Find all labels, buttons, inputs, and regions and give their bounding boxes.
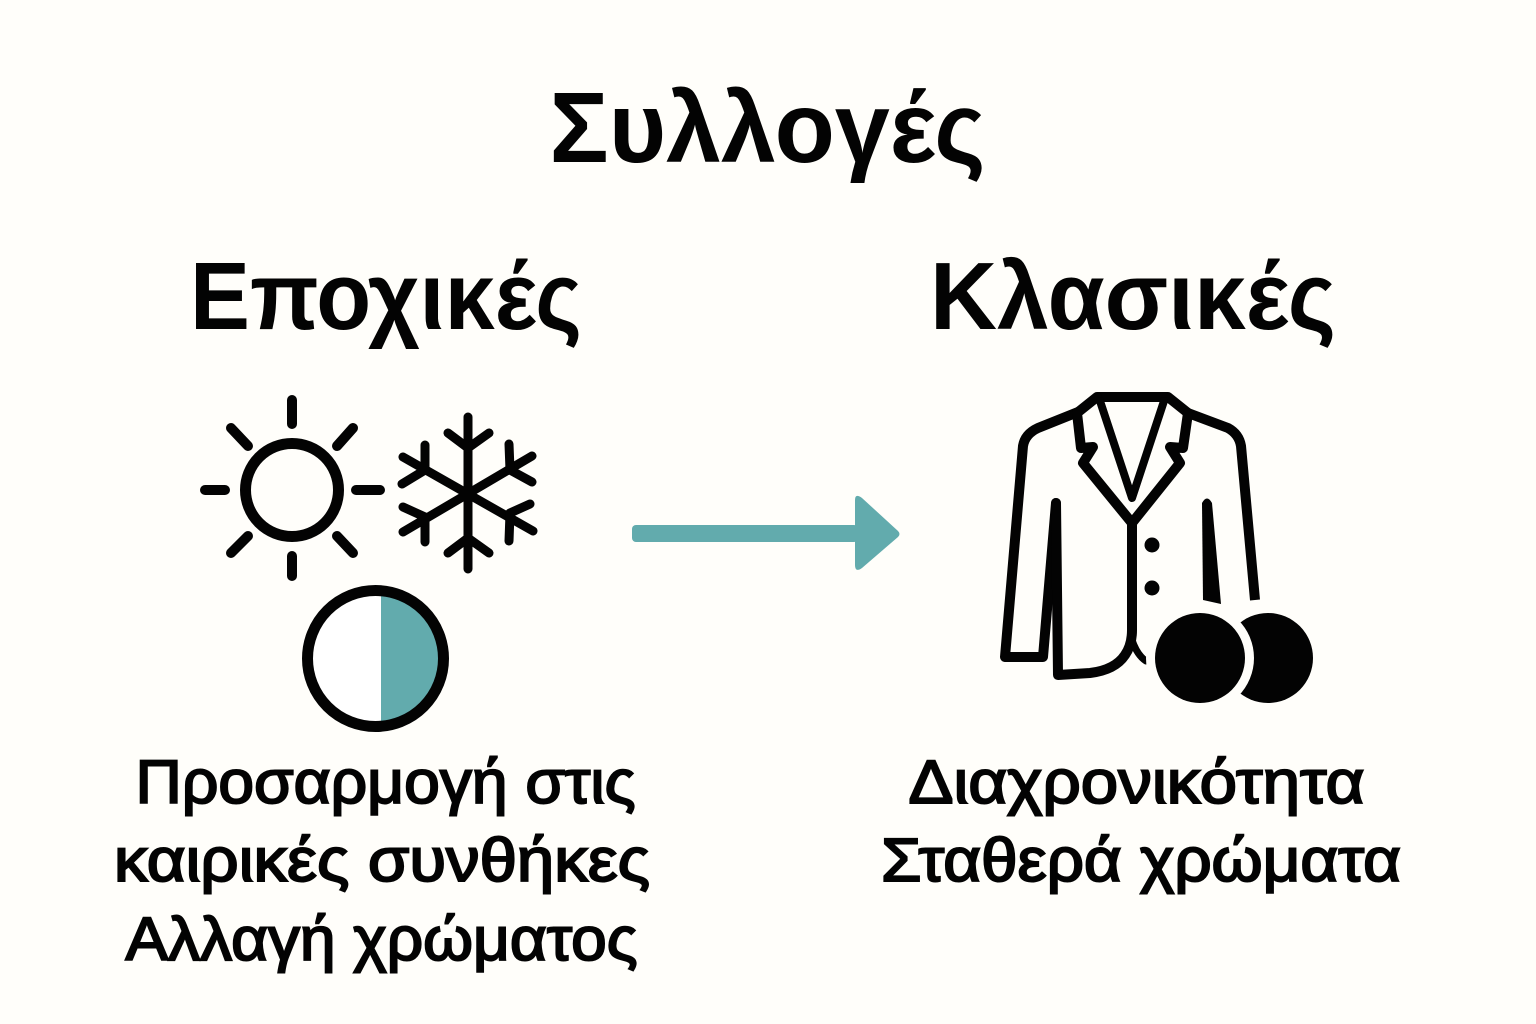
text block: classic: Διαχρονικότητα bbox=[908, 748, 1364, 816]
text block: classic: Σταθερά χρώματα bbox=[881, 826, 1401, 894]
icon: snowflake bbox=[402, 417, 533, 569]
heading: classic: Κλασικές bbox=[930, 243, 1336, 350]
icon: blazer bbox=[1005, 397, 1255, 675]
text block: seasonal: Προσαρμογή στις bbox=[136, 748, 636, 816]
text block: seasonal bbox=[114, 748, 650, 973]
arrow bbox=[632, 496, 900, 570]
text block: classic bbox=[881, 748, 1401, 894]
title: Συλλογές bbox=[550, 72, 986, 184]
text block: seasonal: Αλλαγή χρώματος bbox=[126, 905, 638, 973]
text block: seasonal: καιρικές συνθήκες bbox=[114, 826, 650, 894]
icon: blazer pocket bbox=[1202, 498, 1221, 604]
heading: seasonal: Εποχικές bbox=[190, 243, 582, 350]
icon: sun bbox=[205, 400, 380, 576]
icon: colour discs bbox=[1146, 604, 1313, 712]
icon: half-coloured circle bbox=[308, 590, 444, 726]
icon: blazer buttons bbox=[1144, 538, 1160, 596]
